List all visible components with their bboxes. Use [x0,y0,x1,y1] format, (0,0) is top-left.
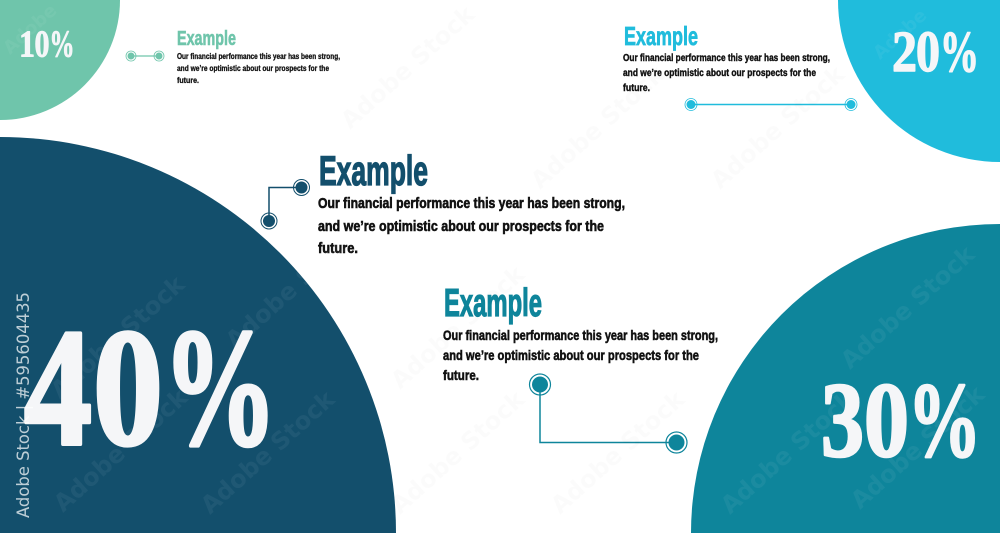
watermark pattern: Adobe Stock [715,385,861,519]
panel: 20% segment: 2 [892,19,917,84]
text block: 40% description: future. [318,240,358,257]
text block: 30% description [443,282,718,383]
panel: 10% segment: % [50,24,74,66]
watermark pattern: Adobe Stock [195,385,341,519]
text block: 10% description: Example [177,28,236,50]
panel: 10% segment: 0 [34,24,50,66]
watermark pattern: Adobe Stock [220,220,366,354]
panel: 40% segment: % [163,295,277,481]
text block: 30% description: Our financial performance this year has been strong, [443,327,718,343]
text block: 30% description: future. [443,367,479,383]
watermark pattern: Adobe Stock [835,240,981,374]
text block: 20% description: Our financial performance this year has been strong, [623,53,830,64]
text block: 10% description [177,28,340,85]
text block: 20% description: and we’re optimistic about our prospects for the [623,68,816,79]
text block: 40% description: and we’re optimistic about our prospects for the [318,218,604,235]
text block: 30% description: and we’re optimistic about our prospects for the [443,347,699,363]
panel: 20% segment: 0 [916,19,940,84]
text block: 20% description: Example [624,21,698,51]
panel: 20% segment [838,0,1000,162]
panel: 30% segment [691,224,1000,533]
connector: 10% [126,51,164,61]
text block: 10% description: future. [177,76,199,85]
text block: 40% description: Our financial performance this year has been strong, [318,195,625,212]
panel: 30% segment: 0 [864,362,909,480]
watermark pattern: Adobe Stock [45,270,191,404]
watermark pattern: Adobe [0,0,61,59]
text block: 30% description: Example [444,282,542,325]
connector: 30% [530,374,687,453]
text block: 10% description: Our financial performance this year has been strong, [177,52,340,61]
text block: 40% description: Example [319,147,428,194]
text block: 20% description [623,21,830,94]
text block: 40% description [318,147,625,257]
panel: 20% segment: % [940,19,979,84]
watermark pattern: Adobe Stock [845,380,991,514]
panel: 10% segment [0,0,120,120]
panel: 40% segment [0,137,396,533]
connector: 20% [685,98,857,110]
panel: 40% segment: 0 [93,295,163,481]
text block: 20% description: future. [623,83,650,94]
watermark pattern: Adobe Stock [48,383,194,517]
stock id label: Adobe Stock | #595604435 [14,292,33,518]
text block: 10% description: and we’re optimistic about our prospects for the [177,64,329,73]
connector: 40% [261,180,310,229]
watermark pattern: Adobe [869,5,931,64]
panel: 10% segment: 1 [19,24,35,66]
panel: 30% segment: 3 [821,362,864,480]
panel: 40% segment: 4 [24,295,92,481]
